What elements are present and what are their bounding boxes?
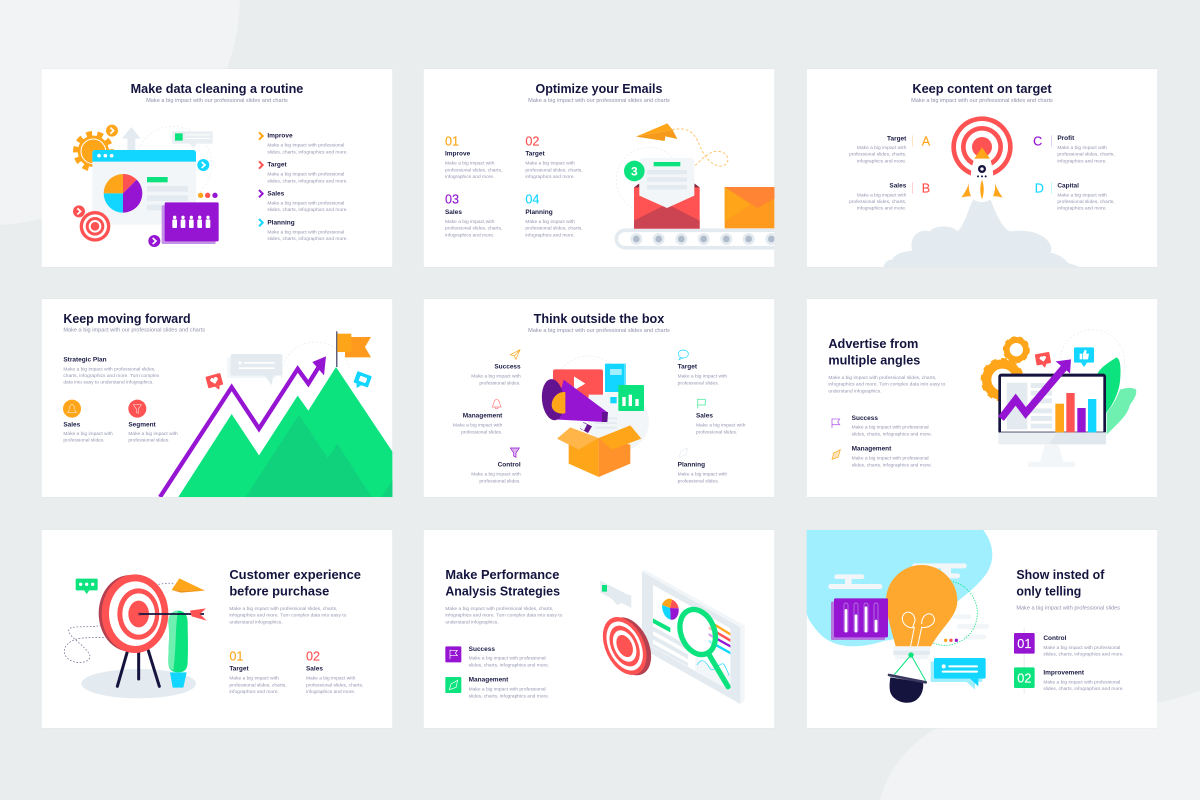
item: Segment: Make a big impact with <box>128 431 178 437</box>
illustration: megaphone in a box <box>540 356 649 477</box>
illustration: mountains with rising arrow <box>160 331 393 497</box>
item: Control: Make a big impact with <box>471 472 521 478</box>
item 01: Control <box>1043 635 1067 642</box>
title: Show insted of <box>1016 568 1105 582</box>
item 03: 03 <box>445 193 459 207</box>
item: Sales <box>63 400 113 444</box>
list: Planning: Make a big impact with professional <box>267 229 344 235</box>
item C: Profit <box>1057 135 1075 142</box>
item 01: Improve <box>445 151 471 158</box>
title: Customer experience <box>229 568 361 582</box>
subtitle: Make a big impact with our professional slides and charts <box>528 328 670 334</box>
item: Sales: Sales <box>696 413 713 420</box>
item 01: infographics and more. <box>229 689 279 695</box>
text block: Make a big impact with professional slides, charts, <box>229 606 337 612</box>
title: Keep content on target <box>912 82 1052 96</box>
item 01: slides, charts, infographics and more. <box>1043 652 1124 658</box>
panel: Make data cleaning a routine <box>42 69 392 267</box>
item 01: 01 <box>229 649 243 663</box>
item A: Target <box>887 135 907 142</box>
item: Sales: Make a big impact with <box>63 431 113 437</box>
item 01: professional slides, charts, <box>445 167 502 173</box>
list: Improve: Improve <box>267 133 293 140</box>
item: Target: Make a big impact with <box>678 374 727 380</box>
item D: infographics and more. <box>1057 206 1107 212</box>
item 01 <box>445 134 502 180</box>
item 01 <box>229 649 287 695</box>
item: Success <box>445 646 549 669</box>
text block: Strategic Plan: Strategic Plan <box>63 356 107 363</box>
text block: Make a big impact with professional slides, charts, <box>828 375 936 381</box>
title <box>229 568 361 599</box>
item: Management: professional slides. <box>461 429 502 435</box>
list: Sales: slides, charts, infographics and more. <box>267 207 348 213</box>
item 02 <box>306 649 363 695</box>
illustration: data dashboard <box>73 125 219 247</box>
list: Planning: Planning <box>267 219 295 226</box>
item B: B <box>922 181 930 195</box>
subtitle: Make a big impact with our professional slides and charts <box>911 98 1053 104</box>
item: Sales: professional slides. <box>63 438 105 444</box>
item: Planning: Planning <box>678 462 705 469</box>
item D: Capital <box>1057 182 1079 189</box>
item: Management: Make a big impact with professional <box>469 687 546 693</box>
item: Control: Control <box>498 462 521 469</box>
illustration: email conveyor: 3 <box>631 164 638 178</box>
item 02: Make a big impact with professional <box>1043 679 1120 685</box>
item: Sales: Sales <box>63 421 81 428</box>
text block: Strategic Plan: charts, infographics and more. Turn complex <box>63 373 160 379</box>
item B: infographics and more. <box>857 206 906 212</box>
item: Target: professional slides. <box>678 380 719 386</box>
panel: Customer experience before purchase <box>42 530 392 728</box>
text block: Strategic Plan <box>63 356 160 386</box>
item: Planning: professional slides. <box>678 478 719 484</box>
item: Sales: professional slides. <box>696 429 737 435</box>
item 04: 04 <box>525 193 539 207</box>
title: Advertise from <box>828 337 918 351</box>
text block <box>445 606 563 626</box>
title: Make data cleaning a routine <box>131 82 303 96</box>
list: Planning <box>259 219 348 242</box>
item A: Make a big impact with <box>857 145 907 151</box>
item: Planning <box>678 448 727 484</box>
illustration: target with arrow <box>64 574 207 698</box>
item 01: Make a big impact with professional <box>1043 645 1120 651</box>
item: Target: Target <box>678 364 698 371</box>
item: Management: Management <box>852 446 892 453</box>
text block: Strategic Plan: Make a big impact with professional slides, <box>63 366 155 372</box>
item 02: professional slides, charts, <box>525 167 583 173</box>
panel: Make Performance Analysis Strategies <box>424 530 774 728</box>
item 03: Sales <box>445 209 462 216</box>
item 01: 01 <box>1017 637 1031 651</box>
list: Planning: slides, charts, infographics and more. <box>267 236 348 242</box>
item 01: professional slides, charts, <box>229 682 287 688</box>
item 02: professional slides, charts, <box>306 682 363 688</box>
list: Target: Target <box>267 162 288 169</box>
list: Sales: Sales <box>267 190 285 197</box>
timeline line <box>1023 627 1026 694</box>
illustration: monitor with growth chart <box>982 330 1136 467</box>
item: Segment <box>128 400 178 444</box>
text block <box>229 606 347 625</box>
item C <box>1033 134 1115 164</box>
item 03: professional slides, charts, <box>445 226 502 232</box>
item: Management <box>445 677 549 699</box>
panel: Keep content on target <box>807 69 1157 268</box>
item C: infographics and more. <box>1057 158 1107 164</box>
item D <box>1035 181 1115 212</box>
item 04: infographics and more. <box>525 232 575 238</box>
list: Sales: Make a big impact with professional <box>267 200 344 206</box>
item 02: infographics and more. <box>525 174 575 180</box>
subtitle: Make a big impact with our professional slides and charts <box>146 98 288 104</box>
list: Improve: slides, charts, infographics and more. <box>267 149 348 155</box>
item 02: Improvement <box>1043 670 1085 677</box>
panel: Advertise from multiple angles <box>807 299 1157 497</box>
item: Planning: Make a big impact with <box>678 472 727 478</box>
item: Management: Management <box>469 677 509 684</box>
item A: A <box>922 134 931 148</box>
item: Success: Success <box>852 415 878 422</box>
item: Success: Make a big impact with professional <box>469 656 546 662</box>
list: Target: Make a big impact with professional <box>267 172 344 178</box>
item A <box>849 134 931 164</box>
text block: infographics and more. Turn complex data into easy to <box>445 613 563 619</box>
item 01 <box>1014 633 1124 658</box>
item B: Make a big impact with <box>857 192 907 198</box>
title <box>1016 568 1105 599</box>
item 02: Make a big impact with <box>306 676 356 682</box>
item 01: Target <box>229 666 250 673</box>
illustration: isometric report with magnifier <box>594 570 745 704</box>
item: Management: Make a big impact with professional <box>852 456 929 462</box>
item: Management: Management <box>463 413 503 420</box>
list: Improve <box>259 132 348 155</box>
item B: Sales <box>889 182 907 189</box>
item 03: Make a big impact with <box>445 219 495 225</box>
item 01: infographics and more. <box>445 174 494 180</box>
item: Success <box>471 350 521 386</box>
title <box>445 568 560 599</box>
subtitle: Make a big impact with our professional slides and charts <box>63 328 205 334</box>
item: Success: Make a big impact with <box>471 374 521 380</box>
item 02: infographics and more. <box>306 689 355 695</box>
text block: understand infographics. <box>229 619 283 625</box>
item 02 <box>1014 667 1124 692</box>
panel: Optimize your Emails <box>424 69 790 267</box>
title <box>828 337 920 368</box>
item 02: Make a big impact with <box>525 161 575 167</box>
item A: professional slides, charts, <box>849 152 906 158</box>
item 03: infographics and more. <box>445 232 494 238</box>
item C: professional slides, charts, <box>1057 152 1115 158</box>
panel: Think outside the box <box>424 299 774 497</box>
item 04: Planning <box>525 209 553 216</box>
subtitle: Make a big impact with professional slides <box>1016 605 1120 611</box>
list: Sales <box>259 190 348 213</box>
item D: D <box>1035 181 1044 195</box>
text block: understand infographics. <box>828 389 882 395</box>
title: Make Performance <box>445 568 559 582</box>
item 02: 02 <box>306 649 320 663</box>
panel: Show insted of only telling <box>807 530 1157 728</box>
item: Success: Make a big impact with professional <box>852 425 929 431</box>
item: Success: slides, charts, infographics and more. <box>852 432 932 438</box>
text block <box>828 375 946 395</box>
item 02: Target <box>525 151 546 158</box>
item: Control <box>471 448 521 484</box>
item: Segment: professional slides. <box>128 438 170 444</box>
subtitle: Make a big impact with our professional slides and charts <box>528 98 670 104</box>
text block: infographics and more. Turn complex data into easy to <box>229 613 347 619</box>
item 01: Make a big impact with <box>229 676 279 682</box>
item 01: 01 <box>445 134 459 148</box>
item 02 <box>525 134 583 180</box>
title: Think outside the box <box>534 312 664 326</box>
illustration: rocket and target <box>883 116 1082 268</box>
item: Success: professional slides. <box>479 380 521 386</box>
item: Management <box>832 446 932 468</box>
item 04: Make a big impact with <box>525 219 575 225</box>
item: Sales <box>696 399 746 435</box>
panel: Keep moving forward <box>42 299 393 497</box>
item 02: slides, charts, infographics and more. <box>1043 686 1124 692</box>
item 04 <box>525 193 583 238</box>
item: Segment: Segment <box>128 421 157 428</box>
item: Success: Success <box>494 364 521 371</box>
title: before purchase <box>229 585 329 599</box>
item A: infographics and more. <box>857 158 906 164</box>
item 04: professional slides, charts, <box>525 226 583 232</box>
text block: Strategic Plan: data into easy to understand infographics. <box>63 380 154 386</box>
item: Success: Success <box>469 646 495 653</box>
item C: C <box>1033 134 1042 148</box>
item 02: 02 <box>525 134 539 148</box>
item: Success: slides, charts, infographics and more. <box>469 663 549 669</box>
item: Management: slides, charts, infographics and more. <box>852 462 932 468</box>
illustration: light bulb balloon <box>807 530 992 703</box>
item 02: Sales <box>306 666 323 673</box>
illustration: email conveyor <box>616 123 790 248</box>
item 02: 02 <box>1017 671 1031 685</box>
item: Sales: Make a big impact with <box>696 423 746 429</box>
list: Improve: Make a big impact with professional <box>267 143 344 149</box>
item D: Make a big impact with <box>1057 192 1107 198</box>
text block: understand infographics. <box>445 620 499 626</box>
title: Keep moving forward <box>63 312 191 326</box>
list: Target: slides, charts, infographics and more. <box>267 178 348 184</box>
item: Management: slides, charts, infographics and more. <box>469 693 549 699</box>
item C: Make a big impact with <box>1057 145 1107 151</box>
title: multiple angles <box>828 354 920 368</box>
text block: Make a big impact with professional slides, charts, <box>445 606 553 612</box>
text block: infographics and more. Turn complex data into easy to <box>828 382 946 388</box>
item: Success <box>832 415 932 438</box>
item B <box>849 181 930 212</box>
item B: professional slides, charts, <box>849 199 906 205</box>
item: Management: Make a big impact with <box>453 423 503 429</box>
item D: professional slides, charts, <box>1057 199 1115 205</box>
title: Analysis Strategies <box>445 585 560 599</box>
item: Control: professional slides. <box>479 478 521 484</box>
list: Target <box>259 161 348 184</box>
title: only telling <box>1016 585 1081 599</box>
title: Optimize your Emails <box>535 82 662 96</box>
item: Target <box>678 350 727 386</box>
item 03 <box>445 193 502 238</box>
item 01: Make a big impact with <box>445 161 495 167</box>
item: Management <box>453 399 503 435</box>
